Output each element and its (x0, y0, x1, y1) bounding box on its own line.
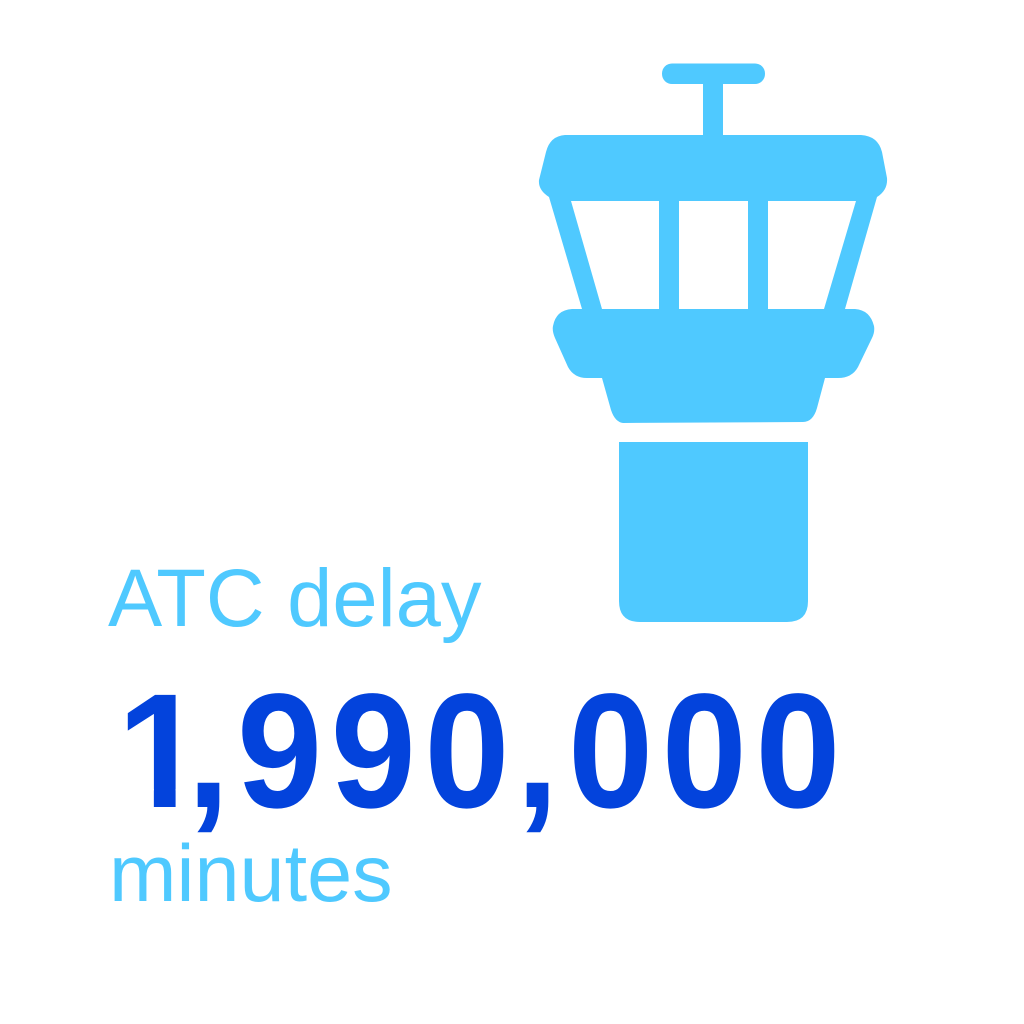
main figure: 1,990,000: 000 (568, 659, 849, 842)
main figure: 1,990,000 (128, 659, 849, 842)
main figure: 1,990,000: 1 (116, 659, 213, 842)
unit: minutes: minutes (109, 829, 393, 919)
main figure: 1,990,000: 990 (237, 659, 518, 842)
main figure: 1,990,000: , (516, 659, 567, 842)
main figure: 1,990,000: , (187, 659, 238, 842)
heading: ATC delay: ATC delay (108, 553, 482, 644)
